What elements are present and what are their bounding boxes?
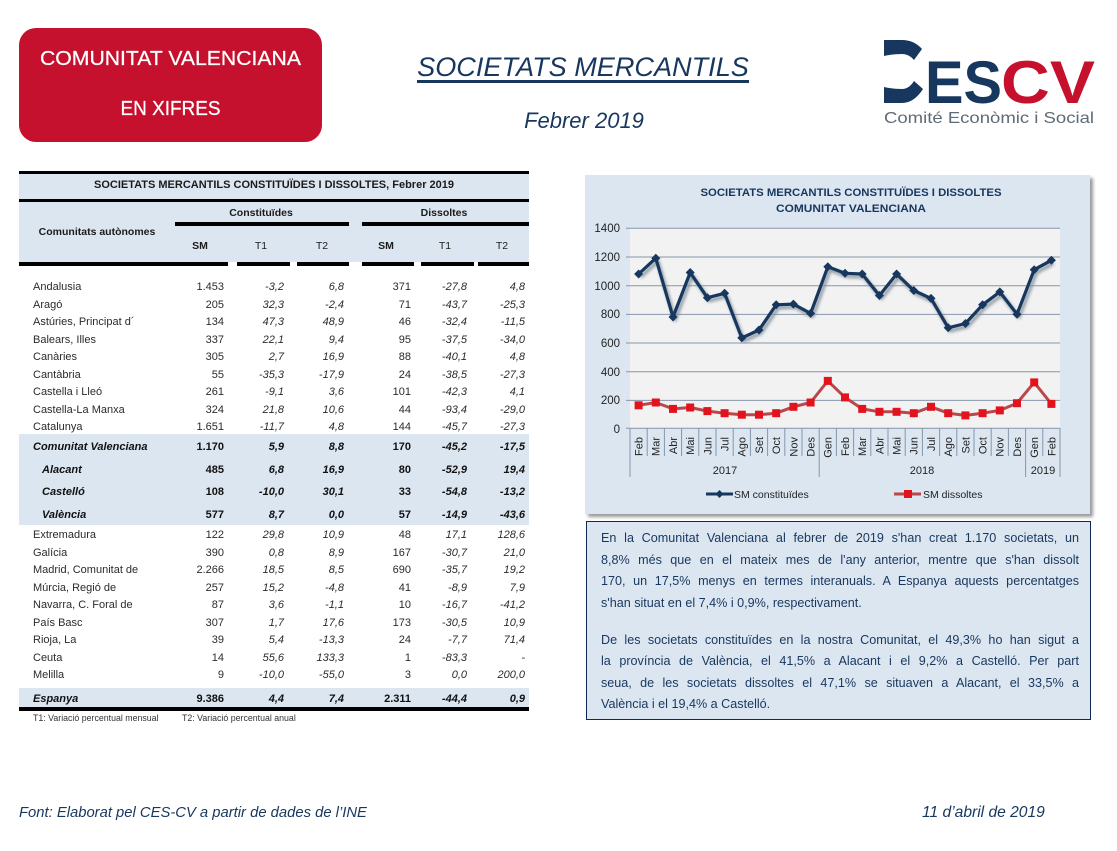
row: Aragó: -43,7 bbox=[442, 299, 467, 311]
row: Castella i Lleó: Castella i Lleó bbox=[33, 386, 102, 398]
row: Extremadura: 122 bbox=[206, 529, 224, 541]
panel: data table bbox=[19, 171, 529, 711]
row: València bbox=[42, 509, 525, 521]
x axis month labels: Jul bbox=[720, 437, 732, 451]
row: Andalusia: 4,8 bbox=[510, 281, 525, 293]
row: Espanya: Espanya bbox=[33, 693, 78, 705]
x axis month labels: Mai bbox=[892, 437, 904, 455]
row: Catalunya bbox=[33, 421, 525, 433]
row: Ceuta bbox=[33, 652, 525, 664]
row: Melilla: 0,0 bbox=[452, 669, 467, 681]
row: Espanya: -44,4 bbox=[442, 693, 467, 705]
x axis month labels: Oct bbox=[771, 437, 783, 454]
row: Múrcia: -8,9 bbox=[448, 582, 467, 594]
panel: line chart bbox=[585, 175, 1095, 519]
row: Cantàbria: -38,5 bbox=[442, 369, 467, 381]
row: Espanya bbox=[33, 693, 525, 705]
row: Melilla: 9 bbox=[218, 669, 224, 681]
legend: SM constituïdes: SM constituïdes bbox=[734, 489, 809, 501]
row: Castella-La Manxa: -29,0 bbox=[500, 404, 525, 416]
row: Rioja: Rioja, La bbox=[33, 634, 76, 646]
column header: SM dissoltes: SM bbox=[378, 240, 394, 252]
row: Castella i Lleó: -42,3 bbox=[442, 386, 467, 398]
row: Navarra: 10 bbox=[399, 599, 411, 611]
row: Madrid: 690 bbox=[393, 564, 411, 576]
row: Catalunya: 1.651 bbox=[196, 421, 224, 433]
x axis month labels: Nov bbox=[788, 437, 800, 457]
row: Madrid bbox=[33, 564, 525, 576]
row: Castella-La Manxa: 21,8 bbox=[263, 404, 284, 416]
row: Galícia: 167 bbox=[393, 547, 411, 559]
row: Galícia: Galícia bbox=[33, 547, 67, 559]
row: Castella i Lleó bbox=[33, 386, 525, 398]
table title: SOCIETATS MERCANTILS CONSTITUÏDES I DISSOLTES, Febrer 2019 bbox=[94, 179, 454, 191]
legend: SM dissoltes bbox=[894, 489, 983, 501]
row: Canàries: 4,8 bbox=[510, 351, 525, 363]
row: Canàries: -40,1 bbox=[442, 351, 467, 363]
badge: Comunitat Valenciana en xifres: COMUNITAT VALENCIANA bbox=[40, 48, 302, 70]
row: Andalusia: -3,2 bbox=[265, 281, 284, 293]
paragraph 2: seua, de les societats dissoltes el 47,1% se situaven a Alacant, el 33,5% a bbox=[601, 676, 1079, 690]
y axis labels: 1400 bbox=[594, 223, 620, 235]
x axis month labels bbox=[634, 437, 1058, 458]
series: SM dissoltes bbox=[639, 381, 1051, 415]
paragraph 1: En la Comunitat Valenciana al febrer de 2019 s'han creat 1.170 societats, un bbox=[601, 531, 1079, 545]
row: Ceuta: -83,3 bbox=[442, 652, 467, 664]
row: Balears: 95 bbox=[399, 334, 411, 346]
row: Catalunya: -11,7 bbox=[260, 421, 284, 433]
row: Comunitat Valenciana: 1.170 bbox=[196, 441, 224, 453]
paragraph 1: s'han situat en el 7,4% i 0,9%, respectivament. bbox=[601, 596, 862, 610]
row: Navarra: -41,2 bbox=[500, 599, 525, 611]
x axis month labels: Mar bbox=[651, 437, 663, 456]
row: Alacant: 6,8 bbox=[269, 464, 284, 476]
x axis month labels: Des bbox=[806, 437, 818, 457]
row: Alacant: 80 bbox=[399, 464, 411, 476]
row: Múrcia: Múrcia, Regió de bbox=[33, 582, 116, 594]
x axis month labels: Jun bbox=[909, 437, 921, 455]
y axis labels: 800 bbox=[601, 309, 620, 321]
row: Cantàbria: -35,3 bbox=[259, 369, 284, 381]
x axis month labels: Set bbox=[960, 437, 972, 454]
row: Castella i Lleó: 101 bbox=[393, 386, 411, 398]
x axis month labels: Abr bbox=[668, 437, 680, 454]
row: València: -14,9 bbox=[442, 509, 467, 521]
row: Extremadura: 29,8 bbox=[263, 529, 284, 541]
row: Castelló: -54,8 bbox=[442, 486, 467, 498]
column header: Comunitats autònomes: Comunitats autònomes bbox=[39, 226, 155, 238]
row: País Basc: País Basc bbox=[33, 617, 83, 629]
row: Astúries: 46 bbox=[399, 316, 411, 328]
row: Ceuta: 133,3 bbox=[316, 652, 344, 664]
table note: T1: T1: Variació percentual mensual bbox=[33, 713, 159, 723]
row: Castella i Lleó: 3,6 bbox=[329, 386, 344, 398]
row: Navarra: 87 bbox=[212, 599, 224, 611]
column header: T2: T2 bbox=[316, 240, 328, 252]
row: Astúries: 47,3 bbox=[263, 316, 284, 328]
y axis labels: 400 bbox=[601, 367, 620, 379]
row: Extremadura: 17,1 bbox=[446, 529, 467, 541]
title: SOCIETATS MERCANTILS bbox=[417, 51, 749, 82]
footer: source: Font: Elaborat pel CES-CV a partir de dades de l’INE bbox=[19, 805, 367, 821]
row: Andalusia bbox=[33, 281, 525, 293]
row: Melilla: -55,0 bbox=[319, 669, 344, 681]
row: Astúries: Astúries, Principat d´ bbox=[33, 316, 134, 328]
row: Astúries: 134 bbox=[206, 316, 224, 328]
row: Canàries: 2,7 bbox=[269, 351, 284, 363]
row: Galícia: 390 bbox=[206, 547, 224, 559]
row: Castelló: 33 bbox=[399, 486, 411, 498]
row: Aragó: Aragó bbox=[33, 299, 62, 311]
row: Alacant: 19,4 bbox=[504, 464, 525, 476]
row: Cantàbria: 24 bbox=[399, 369, 411, 381]
row: València: València bbox=[42, 509, 86, 521]
row: Canàries: 16,9 bbox=[323, 351, 344, 363]
row: Alacant: 485 bbox=[206, 464, 224, 476]
row: Astúries: -11,5 bbox=[501, 316, 525, 328]
row: Galícia: 0,8 bbox=[269, 547, 284, 559]
row: Galícia bbox=[33, 547, 525, 559]
legend: SM dissoltes: SM dissoltes bbox=[923, 489, 983, 501]
text box: analysis bbox=[586, 521, 1091, 720]
row: Espanya: 2.311 bbox=[384, 693, 411, 705]
subtitle: date: Febrer 2019 bbox=[524, 108, 644, 133]
row: Castelló: -13,2 bbox=[500, 486, 525, 498]
row: Balears: 22,1 bbox=[263, 334, 284, 346]
row: Cantàbria bbox=[33, 369, 525, 381]
row: Balears: Balears, Illes bbox=[33, 334, 96, 346]
row: Rioja: -7,7 bbox=[448, 634, 467, 646]
row: Astúries: 48,9 bbox=[323, 316, 344, 328]
logo: CES CV bbox=[884, 40, 1095, 127]
row: Andalusia: -27,8 bbox=[442, 281, 467, 293]
row: Balears: 337 bbox=[206, 334, 224, 346]
row: Balears: -37,5 bbox=[442, 334, 467, 346]
row: Melilla: -10,0 bbox=[259, 669, 284, 681]
row: Castelló bbox=[42, 486, 525, 498]
row: País Basc: 307 bbox=[206, 617, 224, 629]
column header: T1: T1 bbox=[255, 240, 267, 252]
row: Múrcia bbox=[33, 582, 525, 594]
row: País Basc: 1,7 bbox=[269, 617, 284, 629]
x axis month labels: Mar bbox=[857, 437, 869, 456]
row: Madrid: 8,5 bbox=[329, 564, 344, 576]
row: Catalunya: 4,8 bbox=[329, 421, 344, 433]
row: Alacant: -52,9 bbox=[442, 464, 467, 476]
row: Castelló: 30,1 bbox=[323, 486, 344, 498]
row: Madrid: 19,2 bbox=[504, 564, 525, 576]
row: Múrcia: 7,9 bbox=[510, 582, 525, 594]
x axis month labels: Ago bbox=[737, 437, 749, 457]
row: Castelló: 108 bbox=[206, 486, 224, 498]
logo: CES CV: ES bbox=[925, 49, 1002, 116]
row: Castella i Lleó: 261 bbox=[206, 386, 224, 398]
row: Alacant bbox=[42, 464, 525, 476]
row: Madrid: 2.266 bbox=[196, 564, 224, 576]
x axis month labels: Gen bbox=[1029, 437, 1041, 458]
row: Comunitat Valenciana: -17,5 bbox=[500, 441, 525, 453]
y axis labels: 0 bbox=[614, 424, 620, 436]
footer: date: 11 d’abril de 2019 bbox=[922, 804, 1045, 821]
x axis month labels: Set bbox=[754, 437, 766, 454]
x axis month labels: Jun bbox=[702, 437, 714, 455]
row: Aragó: 205 bbox=[206, 299, 224, 311]
row: Castella-La Manxa bbox=[33, 404, 525, 416]
row: Navarra: 3,6 bbox=[269, 599, 284, 611]
y axis labels bbox=[594, 223, 620, 436]
row: País Basc: -30,5 bbox=[442, 617, 467, 629]
row: Aragó: 32,3 bbox=[263, 299, 284, 311]
row: Castella-La Manxa: 10,6 bbox=[323, 404, 344, 416]
row: València: 8,7 bbox=[269, 509, 284, 521]
row: Castelló: Castelló bbox=[42, 486, 85, 498]
series: SM constituïdes bbox=[639, 258, 1053, 341]
row: Madrid: -35,7 bbox=[442, 564, 467, 576]
row: Andalusia: 6,8 bbox=[329, 281, 344, 293]
row: Extremadura: 128,6 bbox=[497, 529, 525, 541]
row: Múrcia: 15,2 bbox=[263, 582, 284, 594]
row: Rioja: 71,4 bbox=[504, 634, 525, 646]
row: Catalunya: -45,7 bbox=[442, 421, 467, 433]
x axis month labels: Feb bbox=[634, 437, 646, 456]
row: Múrcia: 41 bbox=[399, 582, 411, 594]
row: Comunitat Valenciana bbox=[33, 441, 526, 453]
row: Ceuta: - bbox=[521, 652, 525, 664]
column header: SM: SM bbox=[192, 240, 208, 252]
row: Catalunya: -27,3 bbox=[500, 421, 525, 433]
row: Balears bbox=[33, 334, 525, 346]
row: Astúries bbox=[33, 316, 525, 328]
row: Madrid: Madrid, Comunitat de bbox=[33, 564, 138, 576]
row: València: 577 bbox=[206, 509, 224, 521]
column header: T1 dissoltes: T1 bbox=[439, 240, 451, 252]
row: Castella-La Manxa: Castella-La Manxa bbox=[33, 404, 125, 416]
x axis year labels: 2019 bbox=[1031, 465, 1055, 477]
x axis year labels: 2018 bbox=[910, 465, 934, 477]
chart title: SOCIETATS MERCANTILS CONSTITUÏDES I DISSOLTES bbox=[700, 186, 1002, 199]
row: Comunitat Valenciana: 170 bbox=[393, 441, 411, 453]
x axis year labels: 2017 bbox=[713, 465, 737, 477]
chart title bbox=[700, 186, 1002, 215]
row: País Basc: 17,6 bbox=[323, 617, 344, 629]
row: Alacant: Alacant bbox=[42, 464, 82, 476]
x axis month labels: Gen bbox=[823, 437, 835, 458]
row: Galícia: -30,7 bbox=[442, 547, 467, 559]
row: Navarra: Navarra, C. Foral de bbox=[33, 599, 133, 611]
row: Navarra: -1,1 bbox=[325, 599, 344, 611]
row: Ceuta: Ceuta bbox=[33, 652, 62, 664]
row: Canàries: 305 bbox=[206, 351, 224, 363]
plot area with gridlines bbox=[626, 228, 1060, 428]
row: Castelló: -10,0 bbox=[259, 486, 284, 498]
paragraph 1 bbox=[601, 531, 1079, 610]
x axis month labels: Abr bbox=[874, 437, 886, 454]
row: Comunitat Valenciana: -45,2 bbox=[442, 441, 467, 453]
paragraph 1: 170, un 17,5% menys en termes interanuals. A Espanya aquests percentatges bbox=[601, 574, 1079, 588]
logo: CES CV: Comité Econòmic i Social bbox=[884, 110, 1094, 127]
row: Rioja: 5,4 bbox=[269, 634, 284, 646]
row: Canàries: 88 bbox=[399, 351, 411, 363]
row: València: -43,6 bbox=[500, 509, 525, 521]
row: Andalusia: 1.453 bbox=[196, 281, 224, 293]
x axis month labels: Oct bbox=[978, 437, 990, 454]
row: Cantàbria: Cantàbria bbox=[33, 369, 81, 381]
row: Espanya: 7,4 bbox=[329, 693, 344, 705]
row: Madrid: 18,5 bbox=[263, 564, 284, 576]
row: Canàries bbox=[33, 351, 525, 363]
row: Castella-La Manxa: 324 bbox=[206, 404, 224, 416]
row: Aragó: -25,3 bbox=[500, 299, 525, 311]
row: Comunitat Valenciana: Comunitat Valenciana bbox=[33, 441, 148, 453]
row: Melilla: 3 bbox=[405, 669, 411, 681]
row: Cantàbria: 55 bbox=[212, 369, 224, 381]
row: Espanya: 9.386 bbox=[196, 693, 224, 705]
row: Alacant: 16,9 bbox=[323, 464, 344, 476]
row: Múrcia: 257 bbox=[206, 582, 224, 594]
column header: Dissoltes: Dissoltes bbox=[421, 207, 467, 219]
paragraph 2: la província de València, el 41,5% a Alacant i el 9,2% a Castelló. Per part bbox=[601, 654, 1079, 668]
row: València: 0,0 bbox=[329, 509, 344, 521]
row: Rioja: 24 bbox=[399, 634, 411, 646]
x axis month labels: Des bbox=[1012, 437, 1024, 457]
row: Andalusia: Andalusia bbox=[33, 281, 81, 293]
y axis labels: 1000 bbox=[594, 281, 620, 293]
chart title: COMUNITAT VALENCIANA bbox=[776, 203, 926, 215]
row: Navarra: -16,7 bbox=[442, 599, 467, 611]
row: Rioja: -13,3 bbox=[319, 634, 344, 646]
row: Castella-La Manxa: -93,4 bbox=[442, 404, 467, 416]
row: Extremadura: 48 bbox=[399, 529, 411, 541]
row: Andalusia: 371 bbox=[393, 281, 411, 293]
x axis month labels: Ago bbox=[943, 437, 955, 457]
row: Aragó: 71 bbox=[399, 299, 411, 311]
row: Ceuta: 14 bbox=[212, 652, 224, 664]
badge: Comunitat Valenciana en xifres: EN XIFRES bbox=[120, 98, 220, 120]
row: Extremadura: 10,9 bbox=[323, 529, 344, 541]
table note: T2: T2: Variació percentual anual bbox=[182, 713, 296, 723]
x axis month ticks bbox=[630, 428, 1060, 477]
y axis labels: 600 bbox=[601, 338, 620, 350]
row: Espanya: 0,9 bbox=[510, 693, 525, 705]
row: Ceuta: 55,6 bbox=[263, 652, 284, 664]
x axis month labels: Feb bbox=[840, 437, 852, 456]
x axis month labels: Mai bbox=[685, 437, 697, 455]
row: Melilla: Melilla bbox=[33, 669, 64, 681]
row: Cantàbria: -27,3 bbox=[500, 369, 525, 381]
paragraph 1: 8,8% més que en el mateix mes de l'any anterior, mentre que s'han dissolt bbox=[601, 553, 1079, 567]
row: Astúries: -32,4 bbox=[442, 316, 467, 328]
x axis month labels: Feb bbox=[1046, 437, 1058, 456]
badge: Comunitat Valenciana en xifres bbox=[19, 28, 322, 142]
row: València: 57 bbox=[399, 509, 411, 521]
row: Ceuta: 1 bbox=[405, 652, 411, 664]
row: Balears: 9,4 bbox=[329, 334, 344, 346]
row: Rioja bbox=[33, 634, 525, 646]
logo: CES CV: CV bbox=[1001, 49, 1095, 116]
row: Galícia: 8,9 bbox=[329, 547, 344, 559]
row: Aragó bbox=[33, 299, 525, 311]
row: País Basc: 10,9 bbox=[504, 617, 525, 629]
paragraph 2: València i el 19,4% a Castelló. bbox=[601, 697, 770, 711]
y axis labels: 200 bbox=[601, 395, 620, 407]
row: Comunitat Valenciana: 5,9 bbox=[269, 441, 284, 453]
row: Espanya: 4,4 bbox=[269, 693, 284, 705]
row: Canàries: Canàries bbox=[33, 351, 77, 363]
row: Rioja: 39 bbox=[212, 634, 224, 646]
paragraph 2: De les societats constituïdes en la nostra Comunitat, el 49,3% ho han sigut a bbox=[601, 633, 1079, 647]
row: Extremadura: Extremadura bbox=[33, 529, 96, 541]
row: Navarra bbox=[33, 599, 525, 611]
row: Aragó: -2,4 bbox=[325, 299, 344, 311]
row: Múrcia: -4,8 bbox=[325, 582, 344, 594]
row: Comunitat Valenciana: 8,8 bbox=[329, 441, 344, 453]
row: Melilla bbox=[33, 669, 525, 681]
row: Cantàbria: -17,9 bbox=[319, 369, 344, 381]
x axis month labels: Nov bbox=[995, 437, 1007, 457]
column header: T2 dissoltes: T2 bbox=[496, 240, 508, 252]
row: Castella i Lleó: -9,1 bbox=[265, 386, 284, 398]
row: Galícia: 21,0 bbox=[504, 547, 525, 559]
row: País Basc: 173 bbox=[393, 617, 411, 629]
row: Extremadura bbox=[33, 529, 525, 541]
row: Catalunya: 144 bbox=[393, 421, 411, 433]
row: Castella-La Manxa: 44 bbox=[399, 404, 411, 416]
column header: Constituïdes: Constituïdes bbox=[229, 207, 293, 219]
y axis labels: 1200 bbox=[594, 252, 620, 264]
row: Castella i Lleó: 4,1 bbox=[510, 386, 525, 398]
paragraph 2 bbox=[601, 633, 1079, 711]
x axis year labels bbox=[713, 465, 1055, 477]
row: Balears: -34,0 bbox=[500, 334, 525, 346]
row: País Basc bbox=[33, 617, 525, 629]
row: Catalunya: Catalunya bbox=[33, 421, 83, 433]
x axis month labels: Jul bbox=[926, 437, 938, 451]
row: Melilla: 200,0 bbox=[497, 669, 525, 681]
